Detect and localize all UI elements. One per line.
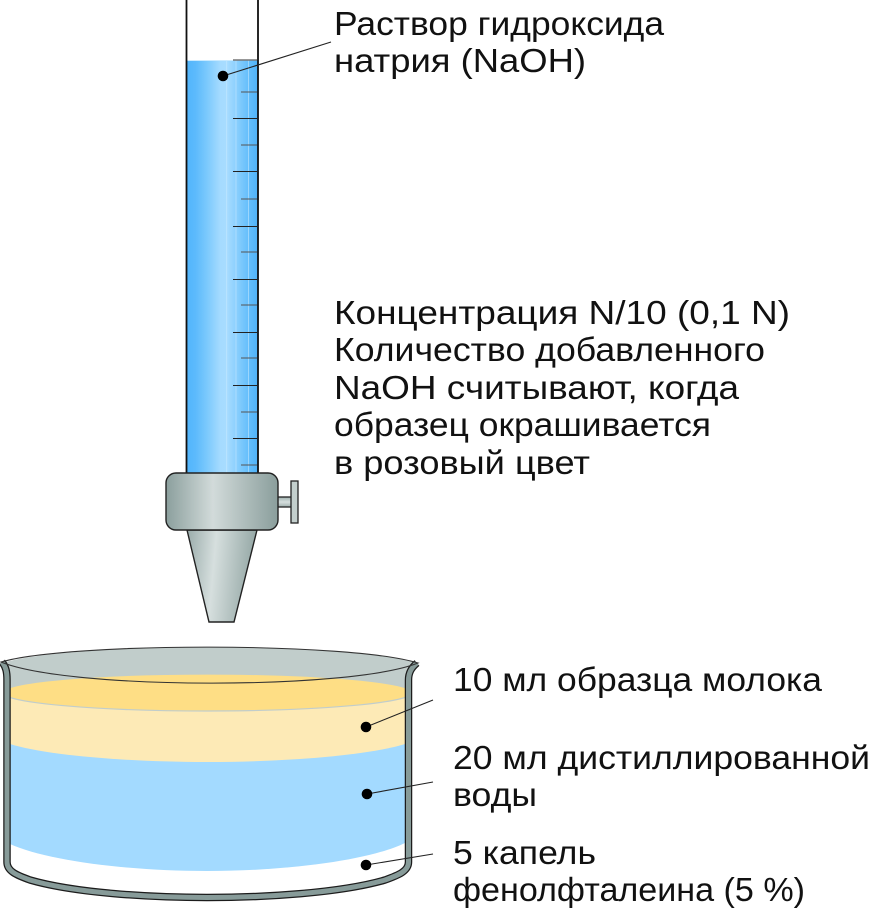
label: phenolphthalein	[453, 834, 805, 908]
leader: milk sample	[361, 700, 433, 732]
beaker glass wall	[2, 662, 417, 898]
label: milk sample: 10 мл образца молока	[453, 661, 823, 698]
burette scale ticks	[233, 60, 257, 465]
burette liquid meniscus	[187, 60, 233, 62]
burette nozzle	[187, 530, 257, 622]
leader: NaOH solution	[218, 42, 331, 81]
label: distilled water: 20 мл дистиллированной	[453, 739, 870, 776]
valve knob	[277, 481, 298, 523]
text: concentration and reading note: Концентрация N/10 (0,1 N)	[334, 294, 790, 331]
cream milk layer	[10, 690, 405, 762]
milk surface	[2, 674, 412, 711]
beaker interior above liquid	[2, 647, 418, 690]
label: phenolphthalein: 5 капель	[453, 834, 596, 871]
burette	[166, 0, 298, 622]
label: sodium hydroxide solution: Раствор гидроксида	[334, 5, 665, 42]
white phenolphthalein layer	[10, 840, 405, 894]
blue distilled water layer	[10, 740, 405, 871]
label: phenolphthalein: фенолфталеина (5 %)	[453, 871, 805, 908]
burette glass walls	[186, 0, 258, 474]
leader: distilled water	[362, 782, 433, 799]
burette liquid: sodium hydroxide solution	[187, 60, 258, 474]
label: sodium hydroxide solution: натрия (NaOH)	[334, 42, 586, 79]
text: concentration and reading note: Количество добавленного	[334, 331, 765, 368]
leader: phenolphthalein	[361, 854, 433, 870]
burette highlight lines	[227, 60, 248, 474]
label: distilled water: воды	[453, 776, 537, 813]
text: concentration and reading note: образец окрашивается	[334, 406, 711, 443]
label: distilled water	[453, 739, 870, 813]
beaker	[1, 647, 418, 898]
valve body	[166, 473, 278, 530]
beaker rim	[1, 647, 418, 683]
text: concentration and reading note: NaOH считывают, когда	[334, 369, 740, 406]
text: concentration and reading note: в розовый цвет	[334, 444, 590, 481]
text: concentration and reading note	[334, 294, 790, 481]
label: sodium hydroxide solution	[334, 5, 665, 79]
